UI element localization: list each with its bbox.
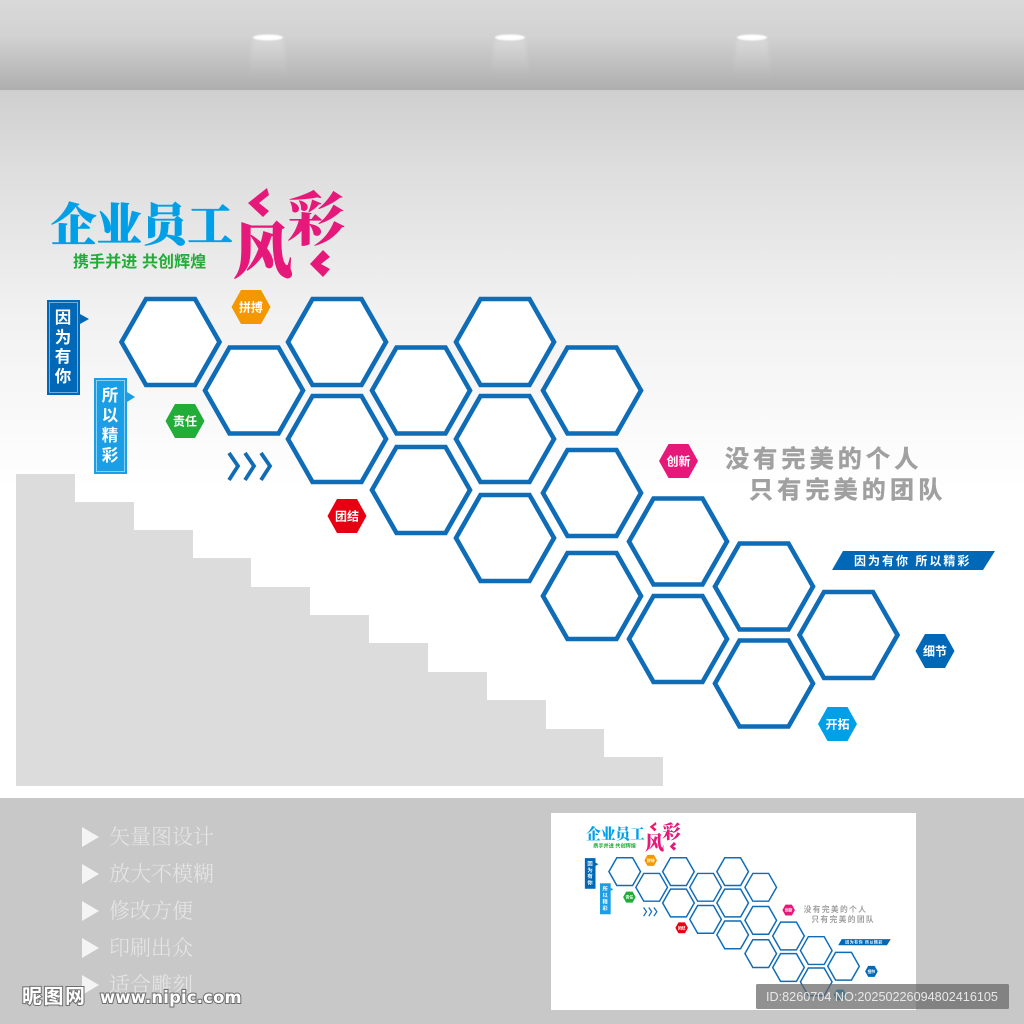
slogan text: 没有完美的个人 xyxy=(725,446,922,473)
watermark: site logo: www.nipic.com xyxy=(100,988,242,1007)
label: 因为有你: 有 xyxy=(55,347,71,366)
preview thumbnail design: 因为有你 所以精彩 xyxy=(845,940,883,945)
preview thumbnail design: 企业员工 xyxy=(586,825,645,843)
badge: 责任 xyxy=(166,404,204,438)
triple chevron arrows xyxy=(229,453,270,480)
ceiling spotlights xyxy=(248,34,772,78)
label: 因为有你: 为 xyxy=(55,328,71,347)
preview thumbnail design: 只有完美的团队 xyxy=(811,914,875,924)
badge: 细节 xyxy=(916,634,954,668)
label: 所以精彩: 彩 xyxy=(102,446,119,465)
label: 所以精彩 xyxy=(94,378,135,474)
preview thumbnail design: 所 xyxy=(603,885,609,893)
feature list: 矢量图设计 xyxy=(109,825,214,849)
preview thumbnail design xyxy=(585,822,891,1000)
preview thumbnail design: 责任 xyxy=(626,895,633,900)
wall background xyxy=(0,90,1024,490)
label: 所以精彩: 精 xyxy=(102,426,118,445)
slanted banner: 因为有你 所以精彩 xyxy=(854,553,971,568)
feature list: 修改方便 xyxy=(109,899,193,923)
feature list xyxy=(82,825,214,997)
tagline: 携手并进 共创辉煌 xyxy=(73,252,206,271)
label: 因为有你: 因 xyxy=(55,309,71,327)
main wall design xyxy=(47,188,995,741)
feature list: 印刷出众 xyxy=(109,936,193,960)
badge: 拼搏 xyxy=(232,290,270,324)
title: 企业员工: 企业员工 xyxy=(51,200,233,251)
hexagon photo frames xyxy=(122,299,898,726)
preview thumbnail design: 以 xyxy=(603,893,609,899)
feature list: 放大不模糊 xyxy=(109,862,214,886)
badge: 责任: 责任 xyxy=(173,414,197,428)
preview thumbnail design: 风 xyxy=(645,831,665,854)
badge: 开拓: 开拓 xyxy=(825,716,850,732)
preview thumbnail design: 精 xyxy=(603,898,609,906)
preview thumbnail design: 彩 xyxy=(603,904,609,912)
title: 彩: 彩 xyxy=(287,188,345,253)
watermark: site logo: 昵图网 xyxy=(22,986,86,1008)
title chevron lower xyxy=(310,250,330,277)
preview thumbnail design: 开拓 xyxy=(836,992,844,997)
title: 风: 风 xyxy=(233,220,293,286)
preview thumbnail design: 创新 xyxy=(785,908,793,913)
preview thumbnail panel xyxy=(551,813,916,1010)
badge: 创新: 创新 xyxy=(666,454,691,468)
slogan text xyxy=(725,446,946,504)
badge: 细节: 细节 xyxy=(923,644,947,658)
slanted banner xyxy=(832,551,995,570)
preview thumbnail design: 为 xyxy=(587,866,593,874)
preview thumbnail design: 细节 xyxy=(868,969,875,974)
image ID bar xyxy=(756,984,1009,1009)
slogan text: 只有完美的团队 xyxy=(749,477,946,504)
feature list: 适合雕刻 xyxy=(109,973,193,997)
preview thumbnail design: 因 xyxy=(587,861,593,868)
ceiling band xyxy=(0,0,1024,90)
badge: 创新 xyxy=(659,444,698,478)
preview thumbnail design: 团结 xyxy=(678,925,686,930)
preview thumbnail design: 有 xyxy=(587,872,593,880)
badge: 拼搏: 拼搏 xyxy=(239,300,263,314)
badge: 团结: 团结 xyxy=(335,508,359,524)
preview thumbnail design: 没有完美的个人 xyxy=(804,904,867,914)
image ID bar: ID:8260704 NO:20250226094802416105 xyxy=(766,990,998,1004)
white lower wall xyxy=(0,490,1024,798)
bottom gray panel xyxy=(0,798,1024,1024)
badge: 团结 xyxy=(328,499,366,533)
preview thumbnail design: 彩 xyxy=(662,822,681,844)
title chevron upper xyxy=(248,188,269,217)
label: 因为有你 xyxy=(47,300,89,395)
gray staircase xyxy=(16,474,663,786)
label: 所以精彩: 所 xyxy=(102,386,118,405)
label: 因为有你: 你 xyxy=(55,367,72,386)
preview thumbnail design: 你 xyxy=(587,879,593,887)
preview thumbnail design: 携手并进 共创辉煌 xyxy=(593,841,636,849)
label: 所以精彩: 以 xyxy=(102,407,119,425)
preview thumbnail design: 拼搏 xyxy=(647,858,655,863)
badge: 开拓 xyxy=(818,707,857,741)
